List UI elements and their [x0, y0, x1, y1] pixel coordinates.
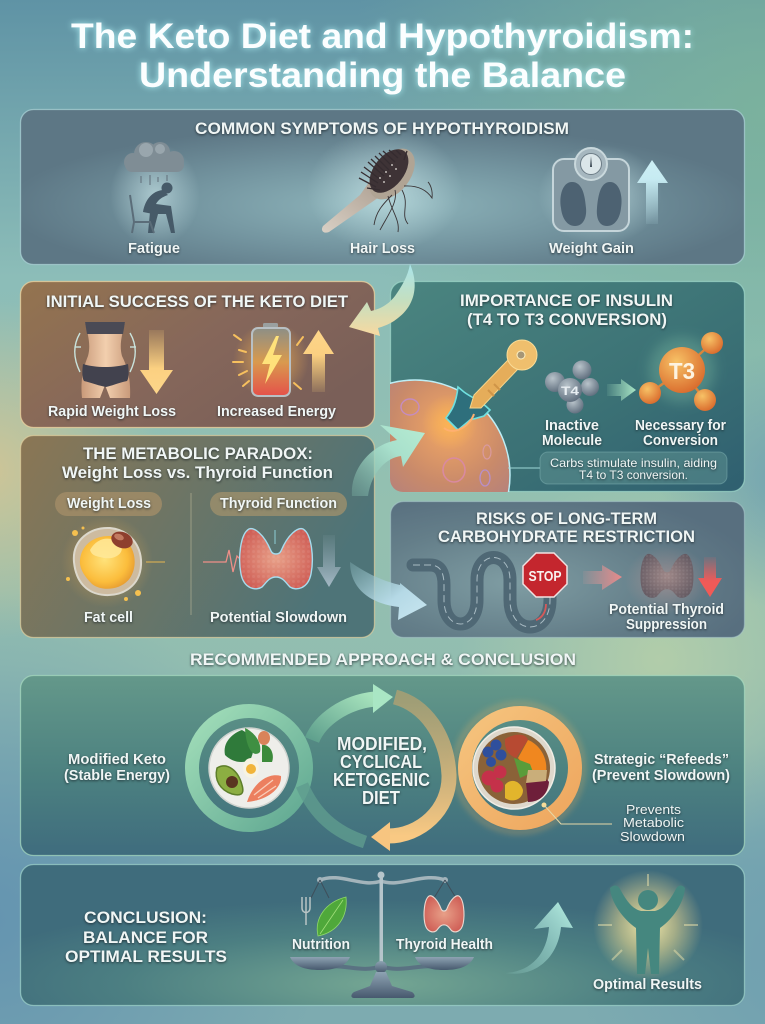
- label: rapid weight loss: Rapid Weight Loss: [48, 404, 176, 420]
- icon: balance scale: [290, 872, 474, 998]
- icon: stop sign: [523, 553, 567, 597]
- green loop: [192, 699, 375, 842]
- label: necessary for conversion: [635, 418, 726, 449]
- arrow head: orange: [371, 822, 390, 851]
- heading: risks: RISKS OF LONG-TERM: [476, 509, 657, 528]
- icon: golden key: [470, 340, 537, 408]
- panel background: [20, 864, 744, 1006]
- heading: importance of insulin: [460, 291, 673, 329]
- label: fat cell: Fat cell: [84, 610, 133, 626]
- icon: up arrow: [637, 160, 668, 224]
- callout: prevents metabolic slowdown: Prevents: [626, 802, 682, 817]
- label: optimal results: Optimal Results: [593, 977, 702, 993]
- center text: modified cyclical ketogenic diet: CYCLICAL: [340, 752, 422, 772]
- arrow: pink: [583, 565, 622, 590]
- heading: initial success: INITIAL SUCCESS OF THE KETO DIET: [46, 292, 349, 311]
- icon: down arrow: [140, 330, 173, 394]
- arrow: rising to results: [505, 902, 573, 974]
- label: necessary for conversion: Necessary for: [635, 418, 726, 434]
- center text: modified cyclical ketogenic diet: DIET: [362, 788, 400, 808]
- panel: risks of long-term carbohydrate restriction: [390, 502, 744, 638]
- label: fatigue: Fatigue: [128, 241, 180, 257]
- panel: the metabolic paradox: [20, 436, 374, 638]
- icon: hair brush with loose hair: [307, 128, 463, 252]
- diagram: infinity loop: [192, 684, 583, 851]
- icon: red down arrow: [698, 557, 722, 597]
- heading: conclusion: BALANCE FOR: [83, 928, 208, 947]
- icon: down arrow: [317, 535, 341, 587]
- panel background: [20, 436, 374, 638]
- icon: person with raised arms: [593, 870, 703, 980]
- heading: conclusion: CONCLUSION:: [84, 908, 207, 927]
- icon: T4 molecule: T4: [561, 384, 579, 398]
- label: inactive molecule: [542, 418, 602, 449]
- icon: fork and leaf: [302, 897, 346, 936]
- panel background: [20, 110, 744, 264]
- icon: T3 molecule: [639, 332, 723, 411]
- label: potential thyroid suppression: [609, 602, 724, 633]
- icon: fatigue, person under rain cloud: [110, 142, 200, 247]
- callout: prevents metabolic slowdown: Slowdown: [620, 829, 685, 844]
- label: necessary for conversion: Conversion: [643, 433, 718, 449]
- panel: initial success of the keto diet: [20, 282, 374, 428]
- label: hair loss: Hair Loss: [350, 241, 415, 257]
- arrow head: green: [373, 684, 393, 713]
- icon: keto plate: [209, 728, 289, 808]
- heading: recommended approach and conclusion: RECOMMENDED APPROACH & CONCLUSION: [190, 650, 576, 669]
- label: nutrition: Nutrition: [292, 937, 350, 953]
- icon: slim waist figure: [75, 322, 136, 398]
- center text: modified cyclical ketogenic diet: [333, 734, 430, 808]
- icon: winding road: [413, 558, 550, 627]
- arrow: paradox to risks: [350, 562, 427, 620]
- heading: conclusion: [65, 908, 227, 966]
- icon: refeed bowl: [473, 727, 555, 809]
- heading: metabolic paradox: [62, 444, 333, 482]
- icon: thyroid on scale: [424, 896, 464, 932]
- label: modified keto: [64, 752, 170, 784]
- heading: conclusion: OPTIMAL RESULTS: [65, 947, 227, 966]
- panel: common symptoms of hypothyroidism: [20, 110, 744, 264]
- icon: suppressed thyroid: [625, 546, 709, 614]
- orange loop: [388, 697, 583, 836]
- title: Understanding the Balance: [139, 56, 626, 95]
- icon: cell with insulin receptor: [390, 379, 511, 492]
- callout: prevents metabolic slowdown: [542, 802, 685, 844]
- panel background: [20, 282, 374, 428]
- center text: modified cyclical ketogenic diet: MODIFIED,: [337, 734, 427, 754]
- panel: modified cyclical ketogenic diet: [20, 676, 744, 856]
- icon: T3 molecule: T3: [669, 358, 695, 384]
- title: [71, 17, 694, 95]
- icon: glowing battery: [233, 322, 309, 398]
- callout: carbs stimulate insulin: [508, 452, 727, 484]
- heading: metabolic paradox: Weight Loss vs. Thyroid Function: [62, 463, 333, 482]
- panel background: [390, 282, 744, 492]
- center text: modified cyclical ketogenic diet: KETOGENIC: [333, 770, 430, 790]
- heading: risks: [438, 509, 695, 546]
- icon: stop sign: STOP: [528, 568, 562, 585]
- panel: conclusion: [20, 864, 744, 1006]
- icon: bathroom scale: [538, 145, 662, 245]
- icon: fat cell: [61, 516, 165, 608]
- callout: carbs stimulate insulin: T4 to T3 conversion.: [579, 468, 688, 482]
- label: strategic refeeds: Strategic “Refeeds”: [594, 752, 729, 768]
- pill: thyroid function: [210, 492, 347, 516]
- label: strategic refeeds: [592, 752, 730, 784]
- label: strategic refeeds: (Prevent Slowdown): [592, 768, 730, 784]
- panel background: [20, 676, 744, 856]
- title: The Keto Diet and Hypothyroidism:: [71, 17, 694, 56]
- label: modified keto: Modified Keto: [68, 752, 166, 768]
- heading: importance of insulin: (T4 TO T3 CONVERSION): [467, 310, 667, 329]
- icon: up arrow: [303, 330, 334, 392]
- heading: metabolic paradox: THE METABOLIC PARADOX:: [83, 444, 313, 463]
- callout: prevents metabolic slowdown: Metabolic: [623, 815, 685, 830]
- label: potential thyroid suppression: Potential Thyroid: [609, 602, 724, 618]
- callout: carbs stimulate insulin: Carbs stimulate insulin, aiding: [550, 456, 717, 470]
- label: weight gain: Weight Gain: [549, 241, 634, 257]
- label: potential thyroid suppression: Suppression: [626, 617, 707, 633]
- icon: T4 molecule: [545, 360, 599, 414]
- label: increased energy: Increased Energy: [217, 404, 336, 420]
- label: thyroid health: Thyroid Health: [396, 937, 493, 953]
- label: potential slowdown: Potential Slowdown: [210, 610, 347, 626]
- label: inactive molecule: Molecule: [542, 433, 602, 449]
- label: modified keto: (Stable Energy): [64, 768, 170, 784]
- pill: weight loss: [55, 492, 162, 516]
- pill: thyroid function: Thyroid Function: [220, 496, 337, 512]
- heading: risks: CARBOHYDRATE RESTRICTION: [438, 527, 695, 546]
- panel: importance of insulin: [390, 281, 746, 492]
- arrow: T4 to T3: [607, 379, 636, 401]
- panel background: [390, 502, 744, 638]
- arrow: paradox to insulin: [352, 425, 425, 496]
- pill: weight loss: Weight Loss: [67, 496, 151, 512]
- icon: thyroid gland with pulse line: [203, 529, 312, 589]
- heading: importance of insulin: IMPORTANCE OF INSULIN: [460, 291, 673, 310]
- heading: common symptoms: COMMON SYMPTOMS OF HYPOTHYROIDISM: [195, 119, 569, 138]
- arrow: symptoms to initial success: [349, 264, 415, 336]
- label: inactive molecule: Inactive: [545, 418, 599, 434]
